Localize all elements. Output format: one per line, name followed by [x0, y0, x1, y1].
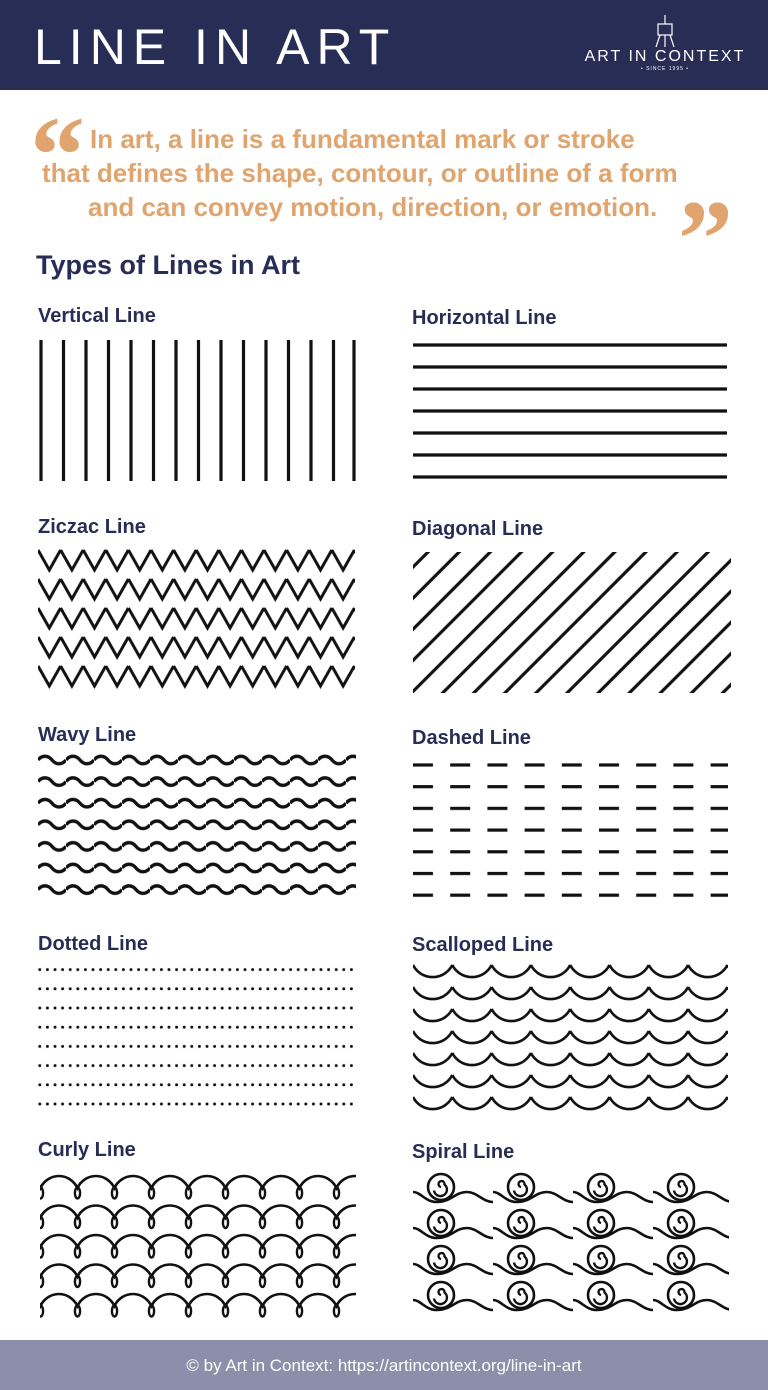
scalloped lines [413, 962, 728, 1116]
quote: In art, a line is a fundamental mark or stroke [90, 124, 635, 154]
label: horizontal: Horizontal Line [412, 307, 556, 329]
quote: that defines the shape, contour, or outline of a form [42, 158, 678, 188]
logo [585, 15, 745, 72]
label: scalloped: Scalloped Line [412, 934, 553, 956]
horizontal lines [413, 345, 727, 477]
label: spiral: Spiral Line [412, 1141, 514, 1163]
label: ziczac: Ziczac Line [38, 516, 146, 538]
header bar [0, 0, 768, 90]
footer [0, 1340, 768, 1390]
quote mark open: “ [30, 94, 85, 216]
wavy lines [38, 750, 356, 901]
quote mark close: ” [678, 178, 733, 300]
label: dashed: Dashed Line [412, 727, 531, 749]
icon: easel [656, 15, 674, 47]
vertical lines [41, 340, 354, 481]
dashed lines [413, 755, 728, 907]
zigzag lines [38, 548, 355, 693]
label: wavy: Wavy Line [38, 724, 136, 746]
section heading: Types of Lines in Art [36, 250, 300, 280]
title: LINE IN ART [34, 19, 396, 75]
footer: © by Art in Context: https://artincontext.org/line-in-art [186, 1356, 582, 1375]
logo: ART IN CONTEXT [585, 48, 745, 65]
label: dotted: Dotted Line [38, 933, 148, 955]
label: vertical: Vertical Line [38, 305, 156, 327]
diagonal lines [413, 552, 731, 693]
curly lines [40, 1172, 356, 1319]
label: curly: Curly Line [38, 1139, 136, 1161]
quote [30, 94, 733, 300]
spiral lines [413, 1170, 729, 1314]
logo: • SINCE 1995 • [641, 66, 689, 72]
label: diagonal: Diagonal Line [412, 518, 543, 540]
quote: and can convey motion, direction, or emotion. [88, 192, 657, 222]
dotted lines [36, 960, 357, 1114]
